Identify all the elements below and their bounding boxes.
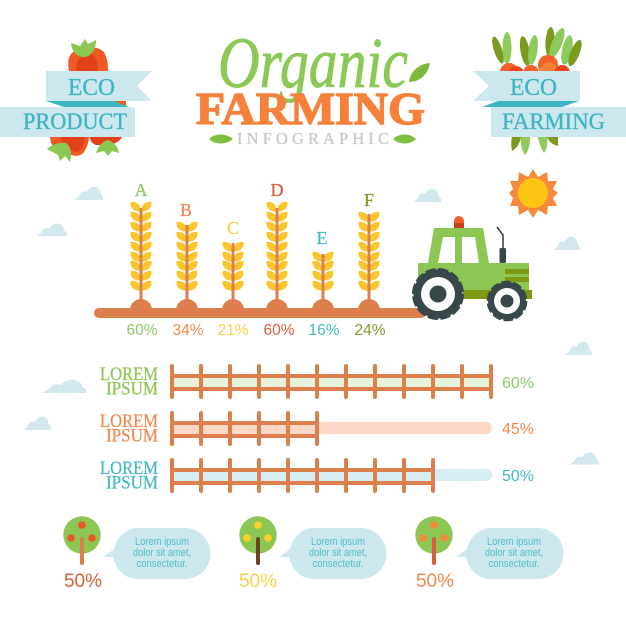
bubble text: dolor sit amet, xyxy=(485,547,543,559)
text: farming: FARMING xyxy=(502,109,605,134)
track xyxy=(172,422,492,434)
icon: carrots xyxy=(490,26,584,155)
badge: eco product xyxy=(0,39,152,162)
fence bar: row 3 50% xyxy=(100,458,534,494)
wheat E 16% xyxy=(308,228,340,339)
wheat C 21%: C xyxy=(227,218,239,238)
wheat A 60% xyxy=(126,180,158,339)
icon: tractor xyxy=(413,216,532,320)
label: IPSUM xyxy=(106,426,158,446)
wheat E 16%: E xyxy=(316,228,328,248)
title: organic: Organic xyxy=(218,23,408,103)
speech bubble xyxy=(456,528,564,579)
label: IPSUM xyxy=(106,474,158,494)
icon: peppers xyxy=(47,39,126,162)
badge: eco farming xyxy=(473,26,626,155)
bubble text: consectetur. xyxy=(488,558,540,570)
value: 50% xyxy=(502,468,534,485)
text: eco: ECO xyxy=(510,75,557,101)
bubble text xyxy=(485,536,543,570)
speech bubble xyxy=(103,528,210,579)
wheat C 21%: 21% xyxy=(217,322,249,339)
chart: wheat bars xyxy=(94,180,426,339)
ribbon: eco xyxy=(473,71,580,101)
value: 45% xyxy=(502,421,534,438)
cloud xyxy=(565,342,592,355)
wheat D 60%: 60% xyxy=(263,322,295,339)
value: 50% xyxy=(416,571,454,592)
wheat C 21% xyxy=(217,218,249,339)
tree callout 1 xyxy=(63,516,210,592)
icon: tree xyxy=(415,516,453,565)
label: LOREM xyxy=(100,412,158,432)
wheat D 60%: D xyxy=(270,180,284,200)
tree callout 3 xyxy=(415,516,564,592)
ribbon: farming xyxy=(491,107,626,137)
icon: tree xyxy=(63,516,101,565)
bubble text: Lorem ipsum xyxy=(487,536,541,548)
speech bubble xyxy=(280,528,386,579)
wheat B 34%: B xyxy=(180,200,192,220)
tree callout 2 xyxy=(239,516,386,592)
icon: leaf xyxy=(409,63,430,82)
track xyxy=(172,376,492,389)
bubble text: consectetur. xyxy=(136,558,188,570)
icon: leaf left xyxy=(209,134,233,144)
fence bar: row 1 60% xyxy=(100,364,534,400)
cloud xyxy=(41,380,86,393)
wheat F 24%: F xyxy=(364,190,374,210)
label: LOREM xyxy=(100,365,158,385)
value: 60% xyxy=(502,375,534,392)
fence xyxy=(170,364,493,399)
title xyxy=(196,23,430,148)
label: IPSUM xyxy=(106,380,158,400)
value: 50% xyxy=(64,571,102,592)
title: farming: FARMING xyxy=(196,83,425,134)
label xyxy=(100,412,158,446)
label: LOREM xyxy=(100,459,158,479)
wheat F 24%: 24% xyxy=(354,322,386,339)
bubble text: dolor sit amet, xyxy=(309,547,367,559)
text: product: PRODUCT xyxy=(23,109,127,134)
fence bar: row 2 45% xyxy=(100,411,534,446)
cloud xyxy=(23,417,51,430)
icon: sun xyxy=(509,169,558,218)
cloud xyxy=(413,189,441,202)
cloud xyxy=(74,187,103,200)
bubble text: dolor sit amet, xyxy=(133,547,191,559)
title: infographic: INFOGRAPHIC xyxy=(237,129,389,148)
ribbon fold xyxy=(46,101,129,107)
ribbon: eco xyxy=(46,71,152,101)
fence xyxy=(170,411,319,446)
wheat F 24% xyxy=(354,190,386,339)
bubble text: Lorem ipsum xyxy=(311,536,365,548)
ribbon: product xyxy=(0,107,135,137)
bubble text xyxy=(309,536,367,570)
label xyxy=(100,365,158,400)
text: eco: ECO xyxy=(68,75,115,101)
wheat A 60%: 60% xyxy=(126,322,158,339)
cloud xyxy=(569,453,599,465)
wheat D 60% xyxy=(263,180,295,339)
value: 50% xyxy=(239,571,277,592)
bubble text: consectetur. xyxy=(312,558,364,570)
bubble text xyxy=(133,536,191,570)
cloud xyxy=(36,224,67,236)
wheat A 60%: A xyxy=(134,180,148,200)
icon: tree xyxy=(239,516,277,565)
wheat B 34% xyxy=(172,200,204,339)
fence xyxy=(170,458,435,493)
icon: leaf right xyxy=(393,134,416,144)
wheat E 16%: 16% xyxy=(308,322,340,339)
track xyxy=(172,469,492,481)
label xyxy=(100,459,158,494)
cloud xyxy=(553,237,580,250)
ground line xyxy=(94,308,426,318)
ribbon fold xyxy=(482,101,579,107)
wheat B 34%: 34% xyxy=(172,322,204,339)
bubble text: Lorem ipsum xyxy=(135,536,189,548)
